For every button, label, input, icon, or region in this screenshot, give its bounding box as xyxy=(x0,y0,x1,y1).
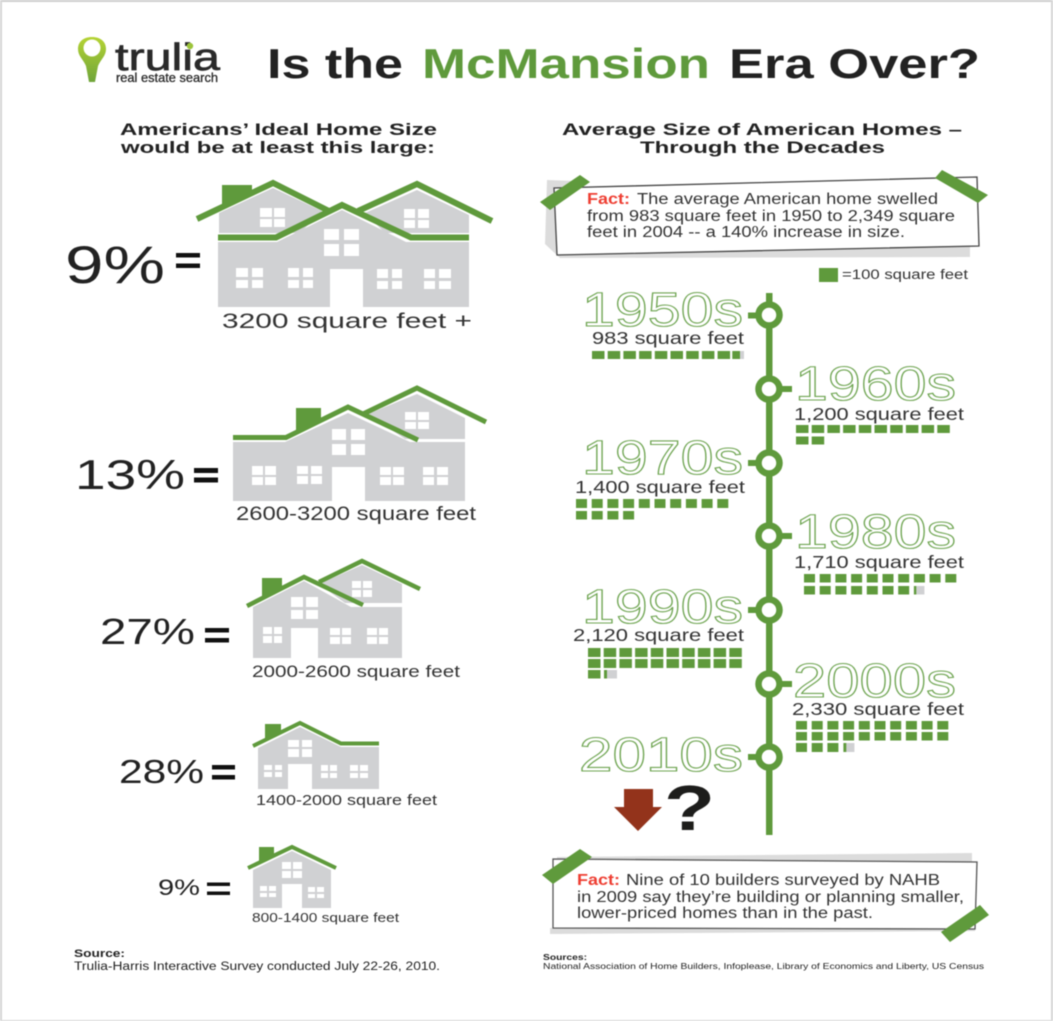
decade: 1990s: 2,120 square feet xyxy=(573,625,744,645)
callout: fact 1950 to 2004 xyxy=(540,170,988,258)
decade: 1950s: 1950s xyxy=(582,284,743,337)
legend: =100 square feet xyxy=(842,267,968,282)
tape xyxy=(941,905,989,942)
row: 13% 2600-3200 square feet xyxy=(75,388,486,525)
legend xyxy=(819,267,968,282)
callout: builders fact: in 2009 say they’re building or planning smaller, xyxy=(577,889,964,906)
row: 9% 3200 square feet plus xyxy=(65,183,492,333)
percentage: 9% xyxy=(65,236,165,295)
percentage: 13% xyxy=(75,451,185,498)
decade: 1980s: 1,710 square feet xyxy=(794,552,964,572)
percentage: 28% xyxy=(119,753,204,790)
callout: fact 1950 to 2004: Fact: xyxy=(587,191,630,208)
size label: 1400-2000 square feet xyxy=(256,792,438,809)
equals xyxy=(212,765,235,780)
source: right: Sources: xyxy=(543,953,587,962)
source: left: Source: xyxy=(74,948,125,960)
decade: 1960s: 1960s xyxy=(795,358,956,411)
callout: fact 1950 to 2004: The average American home swelled xyxy=(637,191,938,208)
decade: 1950s xyxy=(582,284,744,359)
callout: fact 1950 to 2004: from 983 square feet in 1950 to 2,349 square xyxy=(587,208,955,225)
decade: 2010s: 2010s xyxy=(579,729,743,782)
heading: average size through the decades: Average Size of American Homes – xyxy=(562,120,962,139)
title: Era Over? xyxy=(729,40,980,87)
callout: builders fact: lower-priced homes than in the past. xyxy=(577,905,873,922)
source: right xyxy=(543,953,984,971)
tape xyxy=(935,170,988,203)
callout: builders fact xyxy=(542,849,989,942)
heading: average size through the decades: Through the Decades xyxy=(640,138,885,157)
decade: 1990s xyxy=(573,581,744,678)
row: 9% 800-1400 square feet xyxy=(158,847,400,925)
size label: 800-1400 square feet xyxy=(252,911,400,925)
title: Is the xyxy=(267,40,403,87)
tape xyxy=(540,175,590,210)
size label: 2000-2600 square feet xyxy=(252,663,461,681)
decade: 1980s: 1980s xyxy=(795,506,956,559)
row: 28% 1400-2000 square feet xyxy=(119,723,438,809)
title: McMansion xyxy=(422,40,710,87)
size label: 2600-3200 square feet xyxy=(236,504,477,525)
source: left: Trulia-Harris Interactive Survey conducted July 22-26, 2010. xyxy=(74,961,440,973)
decade: 1970s: 1,400 square feet xyxy=(575,477,745,497)
heading: ideal home size xyxy=(120,120,437,157)
row: 27% 2000-2600 square feet xyxy=(100,561,461,681)
heading: average size through the decades xyxy=(562,120,962,157)
size label: 3200 square feet + xyxy=(222,310,472,333)
decade: 1970s xyxy=(575,432,745,520)
decade: 2000s: 2,330 square feet xyxy=(792,699,964,719)
equals xyxy=(207,882,230,895)
logo: trulia: trulia xyxy=(115,37,221,79)
decade: 1970s: 1970s xyxy=(582,432,743,485)
icon: question mark: ? xyxy=(664,772,715,844)
source: left xyxy=(74,948,440,973)
decade: 2000s xyxy=(792,655,964,752)
icon: largest house xyxy=(197,183,492,307)
callout: fact 1950 to 2004: feet in 2004 -- a 140% increase in size. xyxy=(587,224,905,241)
title xyxy=(267,40,980,87)
equals xyxy=(205,628,229,642)
heading: ideal home size: would be at least this large: xyxy=(120,138,435,157)
source: right: National Association of Home Builders, Infoplease, Library of Economics and Liberty, US Census xyxy=(543,961,984,971)
decade: 1980s xyxy=(794,506,964,594)
icon: large house xyxy=(233,388,486,501)
percentage: 9% xyxy=(158,875,200,900)
callout: builders fact: Nine of 10 builders surveyed by NAHB xyxy=(626,872,940,889)
icon: small house xyxy=(253,723,379,789)
decade: 2000s: 2000s xyxy=(793,655,956,708)
callout: builders fact: Fact: xyxy=(577,872,620,889)
icon: smallest house xyxy=(248,847,336,908)
logo: trulia: real estate search xyxy=(116,70,218,85)
icon: medium house xyxy=(247,561,420,658)
tape xyxy=(542,849,592,884)
icon: down arrow xyxy=(614,789,662,831)
timeline xyxy=(748,293,792,835)
decade: 1950s: 983 square feet xyxy=(592,328,744,348)
decade: 1990s: 1990s xyxy=(582,581,743,634)
decade: 1960s xyxy=(794,358,964,444)
percentage: 27% xyxy=(100,611,195,652)
heading: ideal home size: Americans’ Ideal Home Size xyxy=(120,120,437,139)
decade: 1960s: 1,200 square feet xyxy=(794,404,964,424)
equals xyxy=(194,468,218,482)
equals xyxy=(176,253,200,268)
logo: trulia xyxy=(78,37,221,85)
icon: location pin xyxy=(78,37,106,82)
